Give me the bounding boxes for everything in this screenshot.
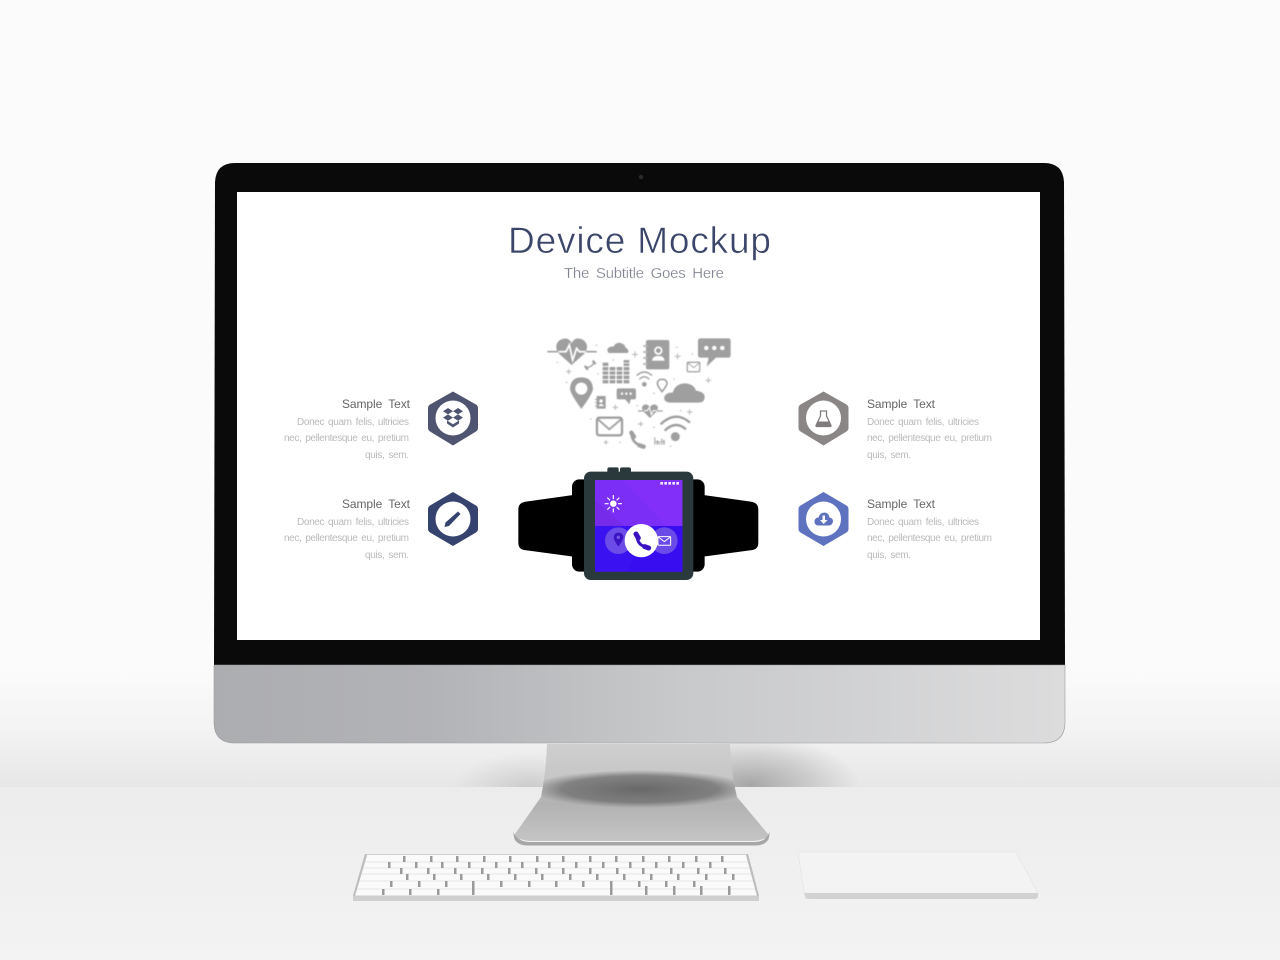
icon: location circle bbox=[605, 527, 632, 554]
body text: Donec quam felis, ultricies bbox=[297, 417, 409, 428]
watch lugs bbox=[572, 479, 705, 572]
item: top right bbox=[798, 392, 992, 461]
background wall and desk bbox=[0, 702, 1280, 960]
icon: envelope large bbox=[597, 418, 622, 435]
body text: nec, pellentesque eu, pretium bbox=[867, 433, 992, 444]
icon: dropbox hexagon bbox=[428, 392, 478, 446]
watch screen bbox=[595, 480, 682, 572]
heading: Sample Text bbox=[342, 497, 411, 511]
body text: nec, pellentesque eu, pretium bbox=[284, 533, 409, 544]
icon: equalizer small bbox=[654, 437, 665, 445]
icon: wifi large bbox=[661, 417, 690, 440]
body text: quis, sem. bbox=[867, 550, 911, 561]
body text: Donec quam felis, ultricies bbox=[297, 517, 409, 528]
body text bbox=[284, 517, 409, 561]
smartwatch bbox=[518, 467, 758, 580]
body text: Donec quam felis, ultricies bbox=[867, 417, 979, 428]
body text: quis, sem. bbox=[867, 450, 911, 461]
watch case bbox=[584, 472, 693, 580]
left strap bbox=[518, 495, 573, 557]
item: bottom left bbox=[284, 492, 478, 561]
status dots bbox=[660, 482, 679, 485]
icon: speech bubble small bbox=[617, 388, 636, 404]
icon: contact book bbox=[643, 340, 669, 369]
body text: quis, sem. bbox=[365, 450, 409, 461]
icon: equalizer bbox=[603, 360, 629, 383]
webcam bbox=[639, 175, 643, 179]
title: Device Mockup bbox=[508, 220, 771, 261]
key side edges bbox=[353, 854, 759, 896]
icon: envelope small bbox=[687, 362, 700, 372]
trackpad bbox=[798, 852, 1038, 899]
icon: map pin small bbox=[657, 379, 667, 392]
body text bbox=[867, 417, 992, 461]
heading: Sample Text bbox=[867, 397, 936, 411]
screen bbox=[237, 192, 1040, 640]
subtitle: The Subtitle Goes Here bbox=[564, 265, 724, 282]
icon: phone large bbox=[631, 433, 644, 447]
monitor stand bbox=[510, 744, 775, 846]
icon cloud bbox=[547, 338, 731, 447]
stand base edge bbox=[513, 832, 770, 846]
monitor chin bbox=[214, 665, 1065, 743]
body text bbox=[284, 417, 409, 461]
icon: flask hexagon bbox=[798, 392, 848, 446]
icon: heart pulse large bbox=[547, 339, 597, 365]
icon: pencil hexagon bbox=[428, 492, 478, 546]
body text: nec, pellentesque eu, pretium bbox=[284, 433, 409, 444]
body text: nec, pellentesque eu, pretium bbox=[867, 533, 992, 544]
heading: Sample Text bbox=[867, 497, 936, 511]
heading: Sample Text bbox=[342, 397, 411, 411]
icon: sun bbox=[605, 495, 622, 512]
keyboard bbox=[353, 854, 759, 901]
icon: call button bbox=[625, 524, 658, 557]
icon: phone small bbox=[585, 361, 595, 369]
body text: Donec quam felis, ultricies bbox=[867, 517, 979, 528]
body text: quis, sem. bbox=[365, 550, 409, 561]
body text bbox=[867, 517, 992, 561]
key gaps bbox=[382, 856, 734, 895]
icon: cloud large bbox=[664, 383, 705, 403]
icon: cloud download hexagon bbox=[798, 492, 848, 546]
decorative plus marks and dots bbox=[566, 351, 711, 445]
icon: contact book small bbox=[595, 396, 606, 409]
icon: map pin large bbox=[570, 377, 593, 409]
icon: wifi small bbox=[637, 372, 652, 386]
item: top left bbox=[284, 392, 478, 461]
icon: small cloud bbox=[607, 343, 628, 353]
monitor bbox=[214, 163, 1065, 743]
monitor bezel bbox=[214, 163, 1065, 665]
right strap bbox=[703, 495, 758, 557]
icon: mail circle bbox=[651, 527, 678, 554]
watch buttons bbox=[607, 467, 631, 473]
item: bottom right bbox=[798, 492, 992, 561]
icon: speech bubble large bbox=[698, 338, 731, 367]
icon: heart pulse small bbox=[638, 405, 663, 418]
